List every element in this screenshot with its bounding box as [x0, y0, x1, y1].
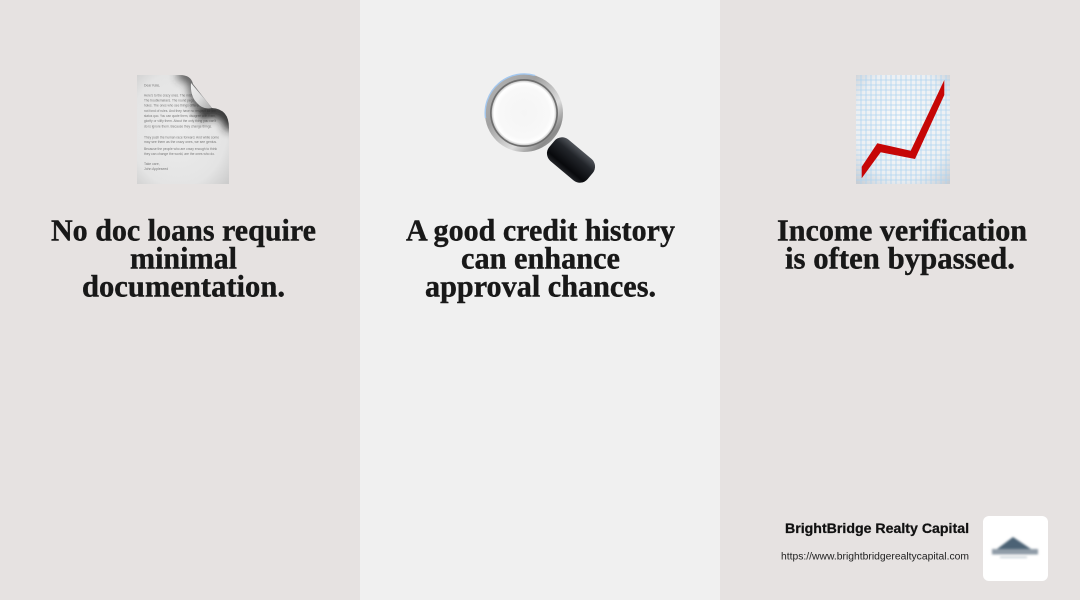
icon: curled document: Here's to the crazy ones. The misfits.	[144, 94, 196, 98]
icon: curled document: Because the people who are crazy enough to think	[144, 147, 217, 151]
icon: curled document	[137, 74, 232, 184]
heading: left: minimal	[130, 240, 237, 276]
icon: curled document: do is ignore them. Because they change things.	[144, 124, 212, 128]
heading: right: Income verification	[777, 212, 1027, 248]
footer: company name: BrightBridge Realty Capital	[785, 521, 969, 536]
icon: magnifying glass	[485, 74, 599, 187]
icon: curled document: Take care,	[144, 162, 160, 166]
icon: curled document: glorify or vilify them. About the only thing you can't	[144, 119, 216, 123]
icon: rising chart on graph paper	[856, 75, 950, 184]
heading: center: can enhance	[461, 240, 620, 276]
icon: curled document: may see them as the crazy ones, we see genius.	[144, 140, 217, 144]
footer: website url: https://www.brightbridgerealtycapital.com	[781, 552, 969, 562]
heading: center: approval chances.	[425, 268, 656, 304]
panel: center background	[360, 0, 720, 600]
handle	[543, 133, 599, 187]
panel: left background	[0, 0, 360, 600]
heading: right	[777, 212, 1027, 276]
icon: curled document: The troublemakers. The round pegs	[144, 98, 194, 102]
heading: center	[406, 212, 675, 304]
red trend line	[862, 80, 944, 178]
icon: curled document: holes. The ones who see things differently.	[144, 104, 204, 108]
heading: left	[51, 212, 316, 304]
icon: curled document: they can change the world, are the ones who do.	[144, 152, 215, 156]
panel: right background	[720, 0, 1080, 600]
icon: curled document: They push the human race forward. And while some	[144, 136, 219, 140]
heading: left: No doc loans require	[51, 212, 316, 248]
icon: curled document: status quo. You can quote them, disagree with them,	[144, 114, 216, 118]
heading: center: A good credit history	[406, 212, 675, 248]
logo	[983, 516, 1048, 581]
icon: curled document: not fond of rules. And they have no respect for the	[144, 109, 216, 113]
icon: curled document: John Appleseed	[144, 167, 168, 171]
icon detail: page flap	[191, 83, 212, 108]
heading: left: documentation.	[82, 268, 285, 304]
graph paper grid	[856, 75, 950, 184]
heading: right: is often bypassed.	[785, 240, 1015, 276]
icon: curled document: Dear Kate,	[144, 84, 160, 88]
